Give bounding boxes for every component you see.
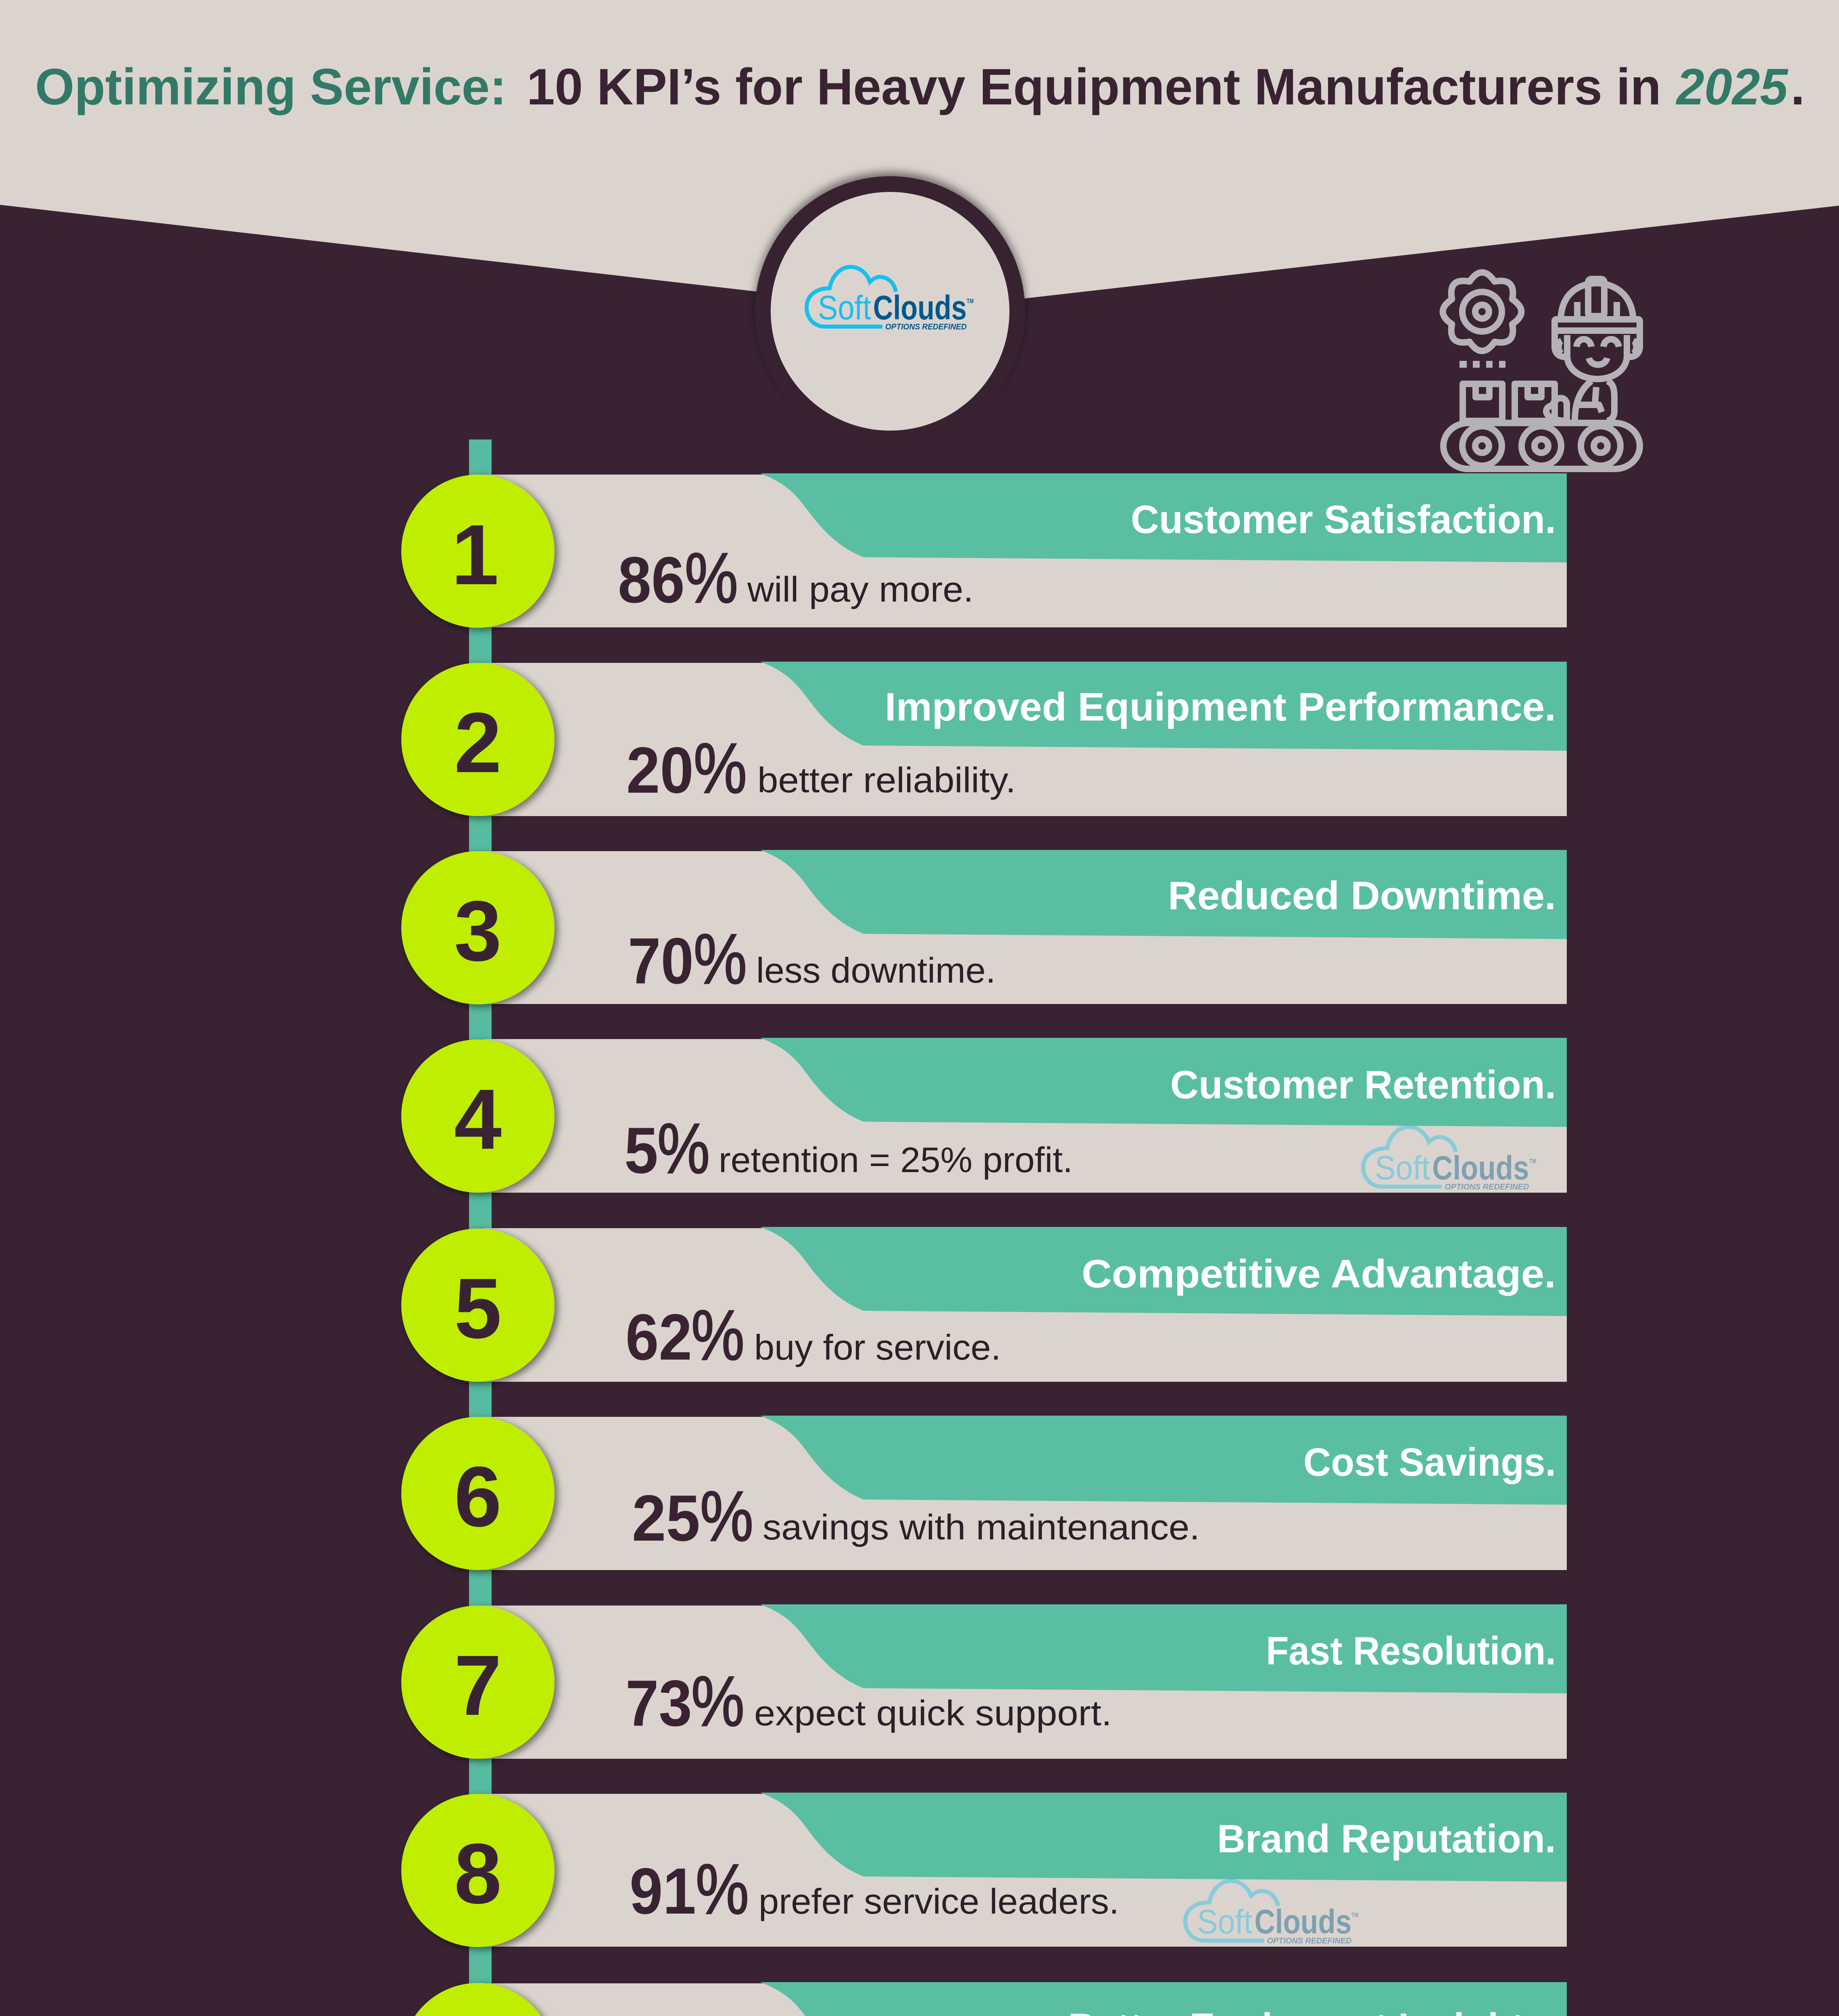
row 8 statistic: % <box>696 1850 749 1929</box>
header banner <box>0 0 1839 298</box>
row 6 statistic: 25 <box>632 1482 700 1555</box>
row 1 heading: Customer Satisfaction. <box>1131 497 1556 541</box>
logo badge <box>755 176 1025 446</box>
row 4 statistic <box>624 1109 710 1188</box>
row 9 ribbon <box>760 1982 1567 2016</box>
row 8 description: prefer service leaders. <box>759 1881 1119 1921</box>
row 5 ribbon <box>760 1227 1567 1316</box>
row 4 logo watermark: Soft <box>1375 1149 1430 1187</box>
row 4 ribbon <box>760 1038 1567 1127</box>
row 3 heading: Reduced Downtime. <box>1168 873 1556 918</box>
row 1 statistic <box>618 539 738 618</box>
row 8 bar <box>484 1794 1567 1947</box>
row 2 statistic <box>626 729 747 808</box>
row 2 bar <box>484 663 1567 816</box>
row 3 number badge <box>401 851 555 1004</box>
row 2 statistic: 20 <box>626 734 694 807</box>
row 8 ribbon <box>760 1793 1567 1882</box>
row 7 description: expect quick support. <box>754 1693 1112 1733</box>
logo: SoftClouds: Soft <box>818 289 871 327</box>
row 2 ribbon <box>760 662 1567 751</box>
title: 10 KPI’s for Heavy Equipment Manufacturers in <box>527 58 1661 115</box>
row 4 number badge: 4 <box>454 1071 502 1167</box>
row 7 statistic <box>626 1662 744 1741</box>
KPI row 5 <box>401 1227 1567 1382</box>
row 3 number badge: 3 <box>454 883 502 979</box>
row 6 statistic: % <box>700 1477 753 1556</box>
row 7 bar <box>484 1606 1567 1759</box>
row 1 bar <box>484 475 1567 627</box>
row 5 statistic: 62 <box>626 1301 692 1374</box>
row 5 heading: Competitive Advantage. <box>1082 1252 1556 1296</box>
row 8 statistic: 91 <box>630 1855 696 1928</box>
row 7 statistic: 73 <box>626 1667 692 1740</box>
row 4 logo watermark: OPTIONS REDEFINED <box>1445 1183 1529 1191</box>
KPI row 2 <box>401 662 1567 816</box>
row 5 bar <box>484 1228 1567 1382</box>
row 1 number badge: 1 <box>451 507 499 602</box>
title: 2025 <box>1676 58 1789 115</box>
row 5 number badge <box>401 1229 555 1382</box>
logo: SoftClouds: OPTIONS REDEFINED <box>885 323 967 331</box>
row 4 logo watermark: TM <box>1529 1158 1536 1165</box>
KPI row 4 <box>401 1038 1567 1193</box>
row 9 number badge <box>401 1983 555 2016</box>
row 1 statistic: % <box>685 539 738 618</box>
icon: conveyor belt <box>1443 423 1640 469</box>
row 7 heading: Fast Resolution. <box>1266 1629 1556 1673</box>
row 1 statistic: 86 <box>618 544 685 616</box>
logo: SoftClouds: Clouds <box>873 289 967 327</box>
row 8 heading: Brand Reputation. <box>1217 1816 1556 1861</box>
KPI row 8 <box>401 1793 1567 1947</box>
KPI row 3 <box>401 850 1567 1004</box>
row 5 statistic <box>626 1296 744 1375</box>
row 4 bar <box>484 1039 1567 1193</box>
row 7 number badge: 7 <box>454 1637 502 1733</box>
row 4 statistic: 5 <box>624 1114 658 1187</box>
row 9 bar <box>484 1983 1567 2016</box>
KPI row 9 <box>401 1982 1567 2016</box>
title: . <box>1791 58 1805 115</box>
row 8 statistic <box>630 1850 749 1929</box>
row 2 number badge <box>401 663 555 816</box>
row 7 number badge <box>401 1606 555 1759</box>
row 3 statistic: % <box>694 920 747 999</box>
KPI row 1 <box>401 473 1567 628</box>
row 4 logo watermark: Clouds <box>1432 1149 1529 1187</box>
row 2 number badge: 2 <box>454 695 502 790</box>
row 7 statistic: % <box>691 1662 744 1741</box>
row 6 number badge <box>401 1417 555 1570</box>
row 5 number badge: 5 <box>454 1260 502 1356</box>
row 6 description: savings with maintenance. <box>763 1507 1200 1547</box>
row 8 number badge: 8 <box>454 1826 502 1921</box>
icon: worker with gear and conveyor <box>1443 273 1640 469</box>
row 4 logo watermark <box>1363 1127 1536 1191</box>
KPI row 7 <box>401 1604 1567 1759</box>
row 3 ribbon <box>760 850 1567 939</box>
row 3 description: less downtime. <box>756 950 996 990</box>
row 2 description: better reliability. <box>757 760 1016 800</box>
row 8 logo watermark: Clouds <box>1254 1903 1351 1941</box>
row 3 statistic: 70 <box>628 925 694 998</box>
row 1 description: will pay more. <box>747 569 974 609</box>
row 2 heading: Improved Equipment Performance. <box>885 685 1556 729</box>
title: Optimizing Service: <box>35 58 507 115</box>
row 5 description: buy for service. <box>754 1327 1001 1367</box>
row 5 statistic: % <box>691 1296 744 1375</box>
logo: SoftClouds: TM <box>967 298 974 305</box>
row 7 ribbon <box>760 1604 1567 1693</box>
icon: dots <box>1460 361 1505 368</box>
row 8 logo watermark: TM <box>1351 1912 1359 1919</box>
icon: gear <box>1443 273 1521 351</box>
row 8 number badge <box>401 1794 555 1947</box>
row 6 statistic <box>632 1477 753 1556</box>
row 8 logo watermark: Soft <box>1197 1903 1252 1941</box>
row 6 ribbon <box>760 1416 1567 1505</box>
row 4 statistic: % <box>657 1109 710 1188</box>
row 1 ribbon <box>760 473 1567 562</box>
title <box>35 58 1805 115</box>
row 4 heading: Customer Retention. <box>1170 1062 1556 1107</box>
row 3 bar <box>484 851 1567 1004</box>
logo: SoftClouds <box>807 267 974 331</box>
row 6 heading: Cost Savings. <box>1303 1440 1556 1484</box>
row 4 description: retention = 25% profit. <box>719 1140 1073 1180</box>
row 1 number badge <box>401 475 555 628</box>
row 6 number badge: 6 <box>454 1449 502 1544</box>
row 6 bar <box>484 1417 1567 1570</box>
KPI row 6 <box>401 1416 1567 1570</box>
row 2 statistic: % <box>694 729 747 808</box>
icon: worker <box>1546 279 1640 421</box>
row 4 number badge <box>401 1039 555 1193</box>
row 8 logo watermark <box>1185 1881 1359 1945</box>
row 3 statistic <box>628 920 747 999</box>
timeline line <box>469 439 492 2016</box>
icon: boxes <box>1463 384 1555 421</box>
row 8 logo watermark: OPTIONS REDEFINED <box>1267 1937 1352 1945</box>
